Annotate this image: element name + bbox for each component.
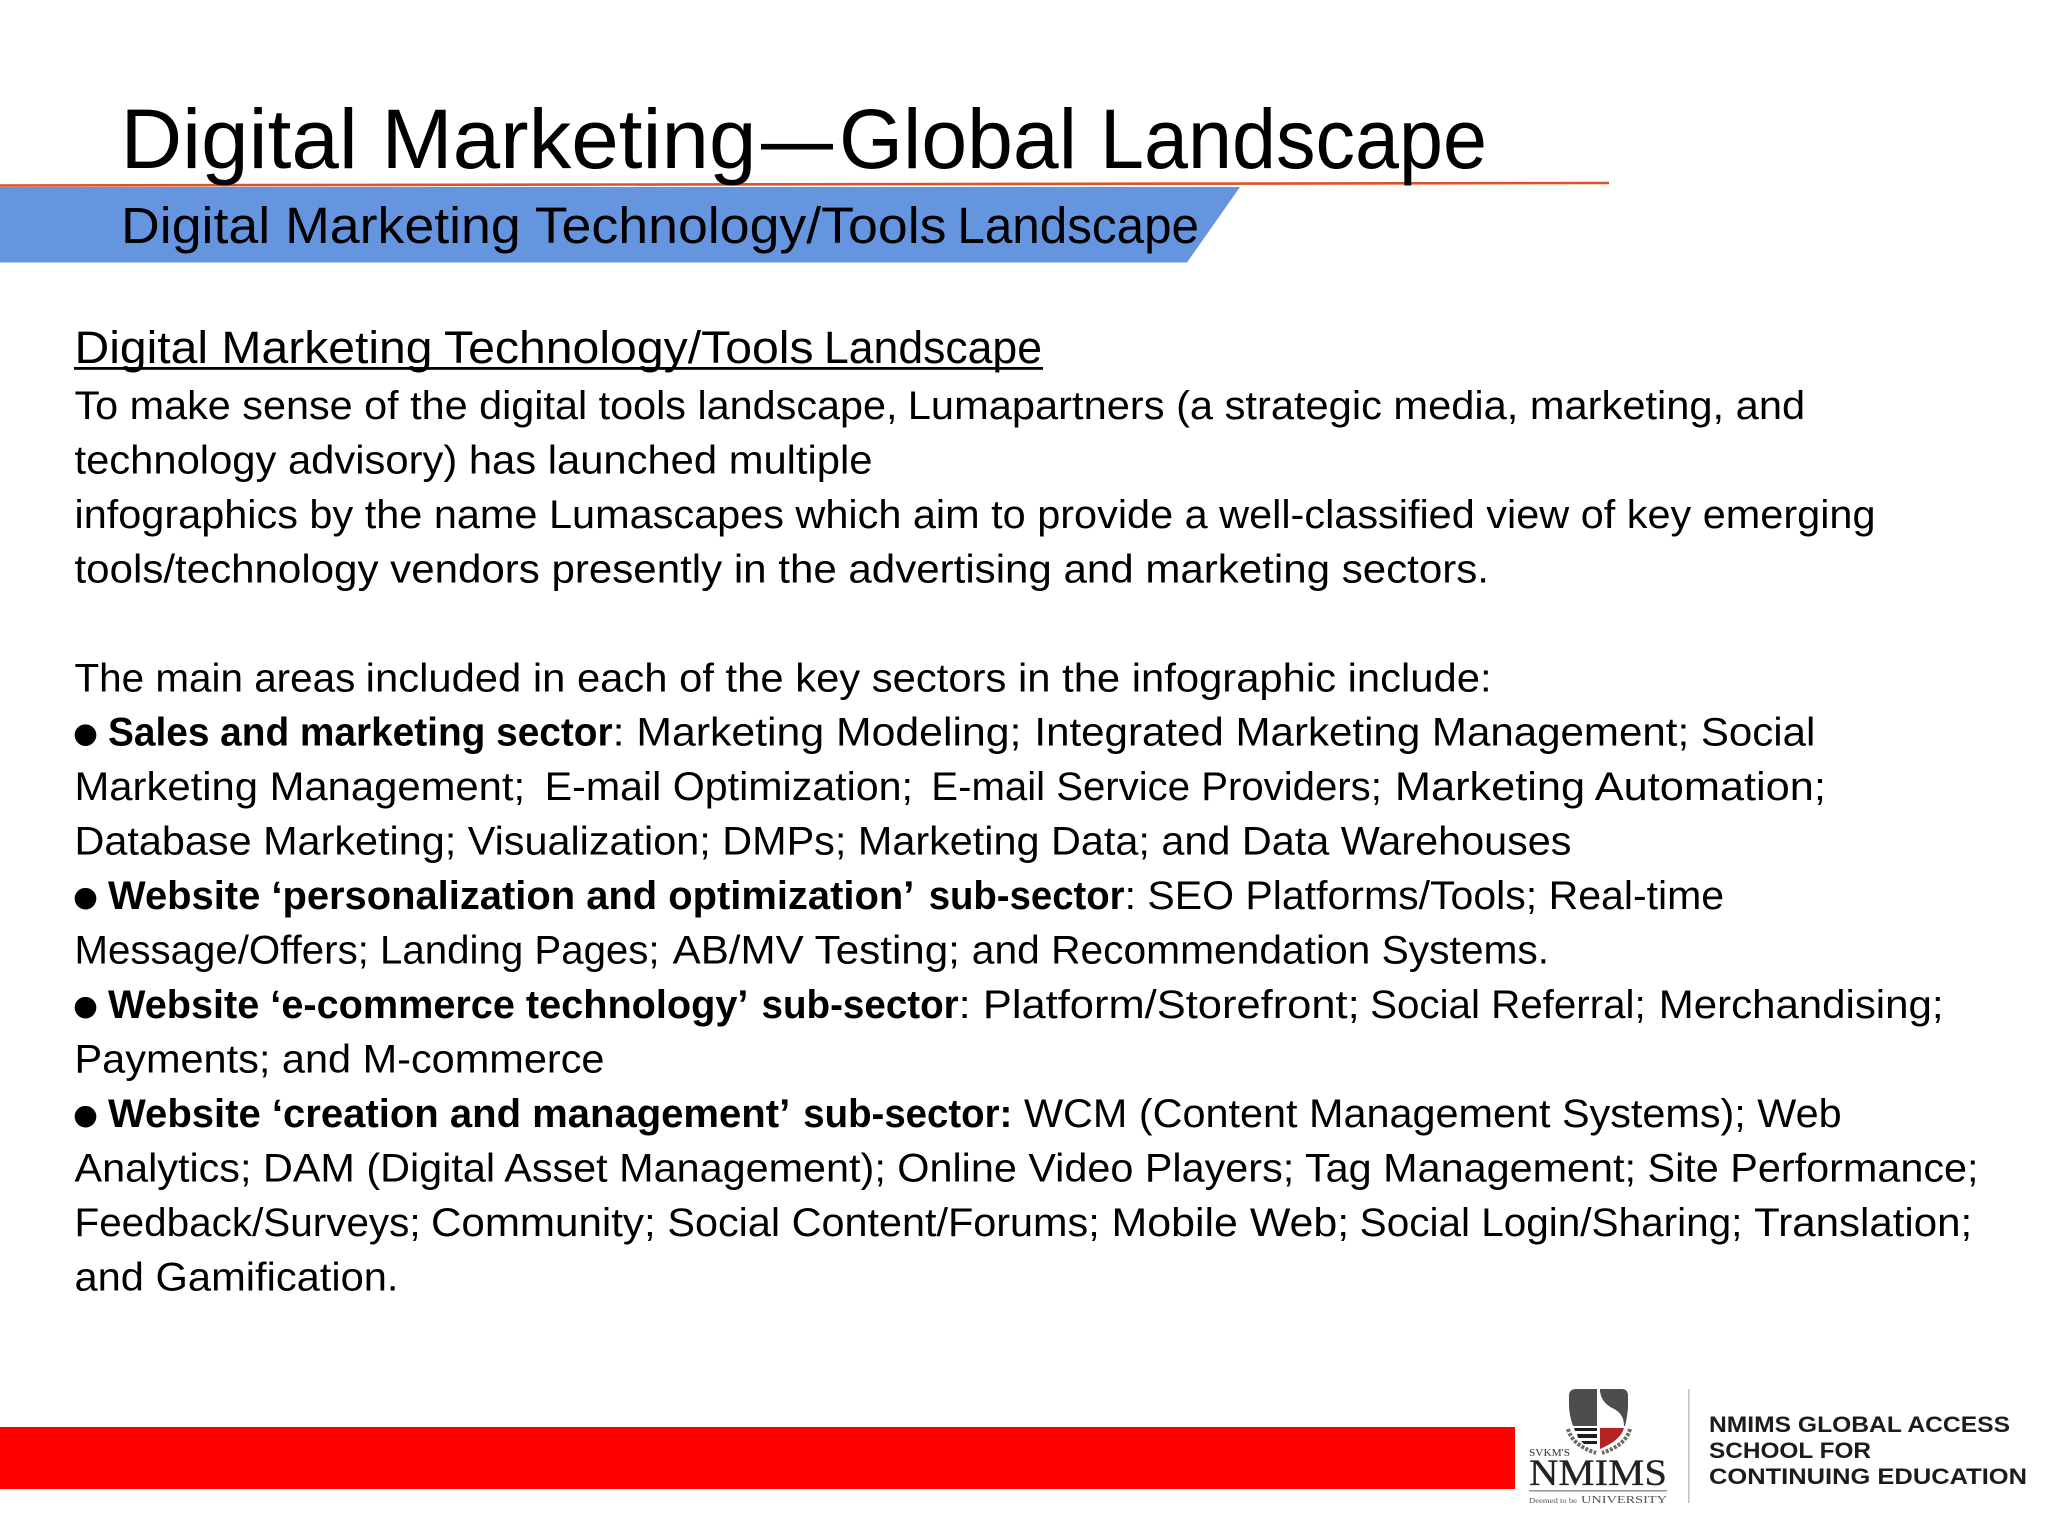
bullet: website creation and management sub-sector xyxy=(72,1071,1978,1299)
intro paragraph: Lumapartners (a strategic media, marketing, and xyxy=(908,384,1805,428)
intro paragraph: infographics by the name Lumascapes which aim to provide a well-classified view of key emerging xyxy=(74,493,1876,537)
section heading: Technology/Tools xyxy=(444,322,814,373)
subtitle: Landscape xyxy=(957,197,1199,254)
title xyxy=(120,92,1487,186)
title: Global xyxy=(839,92,1077,186)
logo wordmark: SVKM'S xyxy=(1529,1448,1570,1459)
bullet: website personalization and optimization sub-sector: • xyxy=(72,853,100,942)
logo wordmark: UNIVERSITY xyxy=(1581,1495,1668,1506)
bullet: website creation and management sub-sector: WCM (Content Management Systems); Web xyxy=(1024,1092,1842,1136)
intro paragraph: To make sense of the digital tools landscape, xyxy=(74,384,897,428)
bullet: sales and marketing sector: Database Marketing; Visualization; DMPs; Marketing Data; and Data Warehouses xyxy=(74,820,1572,864)
logo divider xyxy=(1688,1389,1690,1503)
title: Landscape xyxy=(1100,92,1487,186)
bullet: website creation and management sub-sector: Website ‘creation and management’ xyxy=(108,1092,790,1136)
school name: SCHOOL FOR xyxy=(1709,1438,1871,1463)
header accent line xyxy=(0,183,1609,186)
bullet: website creation and management sub-sector: Feedback/Surveys; xyxy=(74,1201,421,1245)
bullet: website creation and management sub-sector: Social Content/Forums; xyxy=(667,1201,1100,1245)
bullet: sales and marketing sector: : Marketing Modeling; xyxy=(613,711,1021,755)
bullet: website personalization and optimization sub-sector: Website ‘personalization and optimization’ xyxy=(108,874,914,918)
bullet: sales and marketing sector xyxy=(72,690,1826,864)
school name: CONTINUING EDUCATION xyxy=(1709,1464,2027,1489)
list introduction: included in each of the key sectors in the infographic include: xyxy=(366,656,1492,700)
bullet: website personalization and optimization sub-sector: and Recommendation Systems. xyxy=(972,928,1549,972)
section heading: Landscape xyxy=(824,322,1042,373)
bullet: website creation and management sub-sector: sub-sector: xyxy=(803,1092,1012,1136)
intro paragraph: tools/technology vendors presently in the advertising and marketing sectors. xyxy=(74,547,1489,591)
bullet: sales and marketing sector: E-mail Optimization; xyxy=(545,765,913,809)
bullet: sales and marketing sector: Sales and marketing sector xyxy=(108,711,613,755)
bullet: sales and marketing sector: Marketing Management; xyxy=(74,765,525,809)
bullet: website creation and management sub-sector: • xyxy=(72,1071,100,1160)
bullet: sales and marketing sector: Integrated Marketing Management; Social xyxy=(1034,711,1815,755)
list introduction: The main areas xyxy=(74,656,355,700)
school name: NMIMS GLOBAL ACCESS xyxy=(1709,1412,2010,1437)
bullet: website creation and management sub-sector: Social Login/Sharing; xyxy=(1360,1201,1742,1245)
bullet: website creation and management sub-sector: Community; xyxy=(431,1201,656,1245)
title: Digital Marketing xyxy=(120,92,756,186)
bullet: sales and marketing sector: Marketing Automation; xyxy=(1395,765,1826,809)
logo wordmark xyxy=(1529,1448,1668,1506)
bullet: website creation and management sub-sector: Mobile Web; xyxy=(1112,1201,1349,1245)
bullet: website creation and management sub-sector: Translation; xyxy=(1754,1201,1972,1245)
section heading: Digital Marketing xyxy=(74,322,432,373)
bullet: sales and marketing sector: • xyxy=(72,690,100,779)
bullet: website e-commerce technology sub-sector xyxy=(72,962,1944,1081)
title: — xyxy=(761,92,833,186)
bullet: website e-commerce technology sub-sector: sub-sector xyxy=(762,983,959,1027)
bullet: website e-commerce technology sub-sector: Social Referral; xyxy=(1370,983,1646,1027)
bullet: website e-commerce technology sub-sector: : Platform/Storefront; xyxy=(959,983,1360,1027)
bullet: website personalization and optimization sub-sector: AB/MV Testing; xyxy=(673,928,960,972)
icon: NMIMS shield xyxy=(1568,1389,1630,1453)
intro paragraph xyxy=(74,384,1876,591)
bullet: website creation and management sub-sector: and Gamification. xyxy=(74,1255,398,1299)
bullet: website creation and management sub-sector: Analytics; DAM (Digital Asset Management); Online Video Players; Tag Management; Site Performance; xyxy=(74,1146,1978,1190)
bullet: website personalization and optimization sub-sector xyxy=(72,853,1724,972)
section heading xyxy=(74,322,1043,373)
NMIMS logo xyxy=(1529,1389,2027,1506)
subtitle: Digital Marketing Technology/Tools xyxy=(121,197,947,254)
bullet: website e-commerce technology sub-sector: Payments; and M-commerce xyxy=(74,1037,604,1081)
logo wordmark: NMIMS xyxy=(1529,1453,1667,1494)
bullet: website personalization and optimization sub-sector: sub-sector xyxy=(929,874,1125,918)
logo wordmark: Deemed to be xyxy=(1529,1497,1577,1505)
intro paragraph: technology advisory) has launched multiple xyxy=(74,438,872,482)
bullet: website personalization and optimization sub-sector: Message/Offers; Landing Pages; xyxy=(74,928,660,972)
bullet: website e-commerce technology sub-sector: Website ‘e-commerce technology’ xyxy=(108,983,748,1027)
school name xyxy=(1709,1412,2027,1489)
subtitle band xyxy=(0,187,1240,262)
bullet: website e-commerce technology sub-sector: • xyxy=(72,962,100,1051)
bullet: website e-commerce technology sub-sector: Merchandising; xyxy=(1659,983,1944,1027)
bullet: website personalization and optimization sub-sector: : SEO Platforms/Tools; Real-time xyxy=(1125,874,1724,918)
bullet: sales and marketing sector: E-mail Service Providers; xyxy=(931,765,1382,809)
footer red bar xyxy=(0,1427,1515,1489)
